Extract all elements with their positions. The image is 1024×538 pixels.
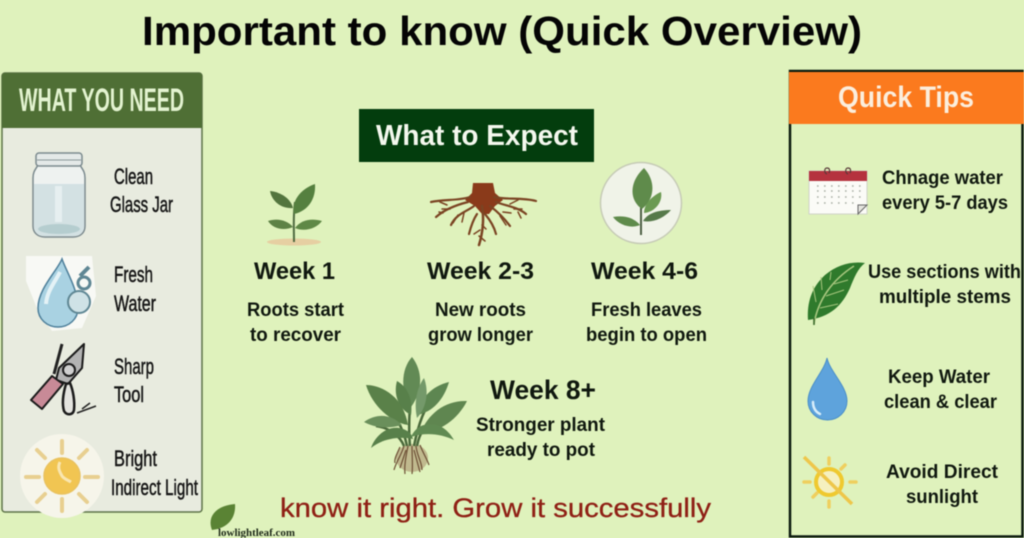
text: use sections: multiple stems (879, 287, 1011, 308)
text: week 2-3: Week 2-3 (427, 258, 534, 285)
text: week 4-6: begin to open (586, 325, 707, 346)
text: week 1: Week 1 (254, 258, 335, 285)
text: keep water clean (884, 367, 998, 413)
text: week 8+ (476, 375, 606, 461)
text: use sections: Use sections with (868, 262, 1021, 283)
text: avoid direct sunlight: Avoid Direct (886, 462, 999, 483)
icon: glass jar (33, 153, 85, 237)
text: week 8+: Week 8+ (490, 375, 596, 405)
icon: water drop (808, 358, 847, 420)
icon: bright sun (20, 434, 104, 518)
icon: leaf (808, 262, 865, 325)
text: use sections (868, 262, 1021, 308)
text: week 8+: ready to pot (487, 440, 596, 461)
text: week 4-6 (586, 258, 707, 346)
text: keep water clean: clean & clear (884, 392, 998, 413)
icon: week 8+ plant with roots (364, 357, 467, 474)
text: clean glass jar (110, 164, 173, 217)
text: week 8+: Stronger plant (476, 415, 606, 436)
text: week 2-3: grow longer (428, 325, 534, 346)
text: keep water clean: Keep Water (888, 367, 991, 388)
heading: what to expect: What to Expect (376, 120, 578, 152)
text: sharp tool (114, 354, 154, 407)
text: change water: every 5-7 days (882, 193, 1008, 214)
text: fresh water: Water (114, 291, 156, 316)
text: week 4-6: Week 4-6 (591, 258, 698, 285)
text: bright indirect light: Indirect Light (111, 475, 198, 500)
text: week 2-3 (427, 258, 534, 346)
text: change water (882, 168, 1008, 214)
icon: week 2-3 roots (431, 183, 536, 245)
text: fresh water: Fresh (114, 262, 153, 287)
text: avoid direct sunlight (886, 462, 999, 508)
text: week 1: to recover (250, 325, 342, 346)
panel: quick tips (789, 71, 1024, 536)
title: Important to know (Quick Overview) (142, 8, 862, 54)
text: change water: Chnage water (882, 168, 1004, 189)
text: week 1: Roots start (247, 300, 345, 321)
tagline: know it right. Grow it successfully (280, 493, 712, 523)
icon: calendar (809, 168, 867, 214)
logo: lowlightleaf (211, 504, 296, 538)
text: avoid direct sunlight: sunlight (906, 487, 979, 508)
heading: what to expect (359, 109, 594, 162)
text: clean glass jar: Clean (114, 164, 153, 189)
text: sharp tool: Tool (114, 382, 144, 407)
text: bright indirect light (111, 446, 198, 500)
text: week 2-3: New roots (435, 300, 526, 321)
text: bright indirect light: Bright (114, 446, 157, 471)
text: fresh water (114, 262, 156, 316)
panel header: what you need (2, 73, 202, 128)
icon: fresh water drop (26, 256, 96, 331)
panel: what you need (2, 73, 202, 518)
icon: crossed out sun (804, 457, 856, 507)
panel header: quick tips: Quick Tips (838, 81, 974, 114)
text: week 4-6: Fresh leaves (591, 300, 702, 321)
panel header: quick tips (789, 72, 1024, 124)
icon: week 1 seedling (267, 184, 322, 246)
icon: sharp tool pruning shears (31, 344, 96, 414)
text: week 1 (247, 258, 345, 346)
icon: week 4-6 leaves in circle (600, 162, 682, 244)
text: clean glass jar: Glass Jar (110, 192, 173, 217)
panel header: what you need: WHAT YOU NEED (19, 82, 184, 118)
text: sharp tool: Sharp (114, 354, 154, 379)
